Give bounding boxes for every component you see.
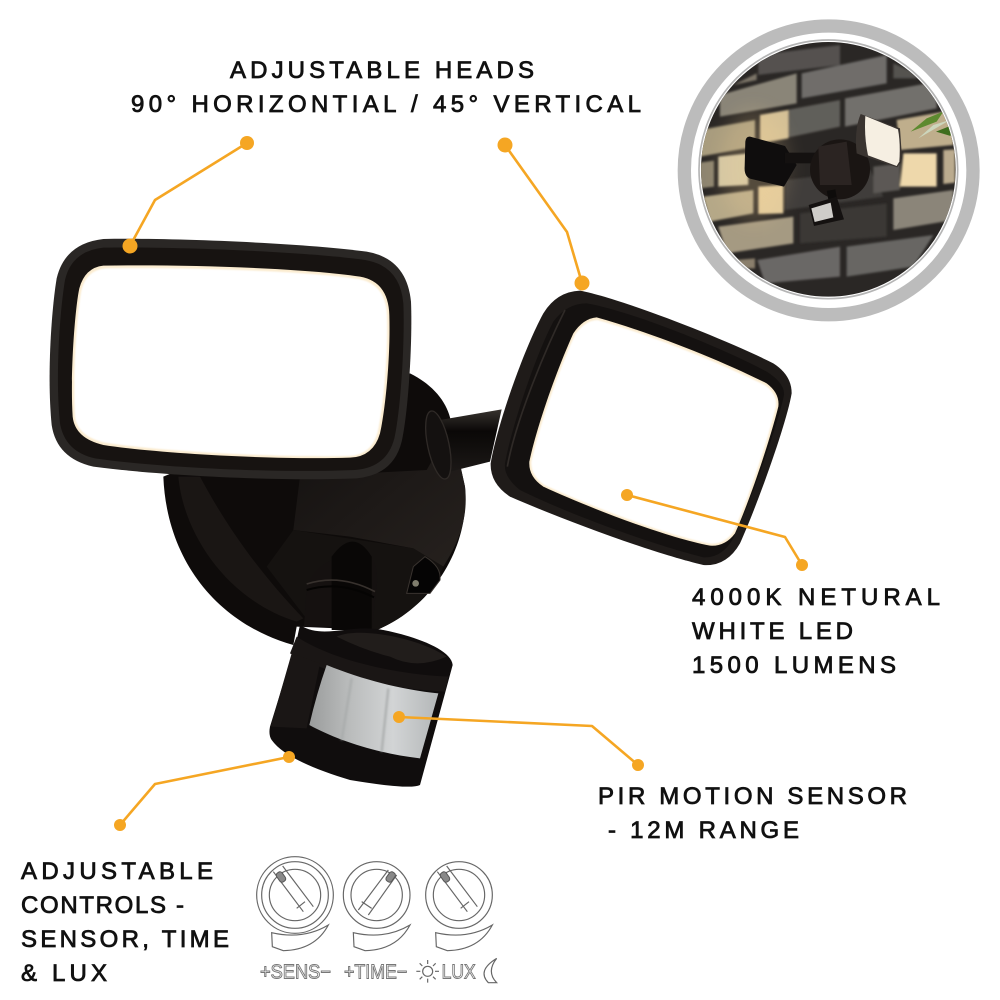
arm to right head — [421, 409, 502, 481]
icon: moon — [484, 958, 497, 983]
left lamp head — [50, 239, 411, 479]
dial: sensitivity — [257, 857, 333, 951]
label: PIR motion sensor — [598, 783, 907, 844]
label: adjustable controls: SENSOR, TIME — [21, 926, 229, 953]
leader line: PIR sensor — [393, 711, 644, 771]
label: LED colour and lumens: WHITE LED — [692, 618, 853, 645]
icon: leaves — [911, 112, 951, 138]
label: LED colour and lumens — [692, 584, 940, 679]
heading: adjustable heads — [131, 57, 641, 118]
sensor neck — [304, 542, 377, 630]
inset photo: light mounted on brick wall — [684, 26, 973, 315]
dial labels — [260, 960, 476, 983]
label: PIR motion sensor: - 12M RANGE — [608, 817, 799, 844]
leader line: left head — [122, 136, 254, 254]
thin inner ring — [699, 40, 958, 299]
label: adjustable controls: ADJUSTABLE — [21, 858, 213, 885]
outer grey ring — [684, 26, 973, 315]
wall base plate — [163, 373, 466, 645]
right lamp head — [491, 291, 792, 565]
sensor — [827, 190, 836, 199]
label: adjustable controls: CONTROLS - — [21, 892, 184, 919]
warm wall glow — [720, 110, 787, 223]
heading: adjustable heads: ADJUSTABLE HEADS — [230, 57, 534, 84]
photo: mounted fixture — [745, 114, 902, 226]
raised lower housing — [267, 530, 443, 630]
light panel — [72, 265, 390, 458]
motion sensor housing — [269, 625, 453, 787]
dial: lux — [426, 862, 492, 951]
label: PIR motion sensor: PIR MOTION SENSOR — [598, 783, 907, 810]
label: adjustable controls: & LUX — [21, 960, 107, 987]
label: LED colour and lumens: 1500 LUMENS — [692, 652, 896, 679]
dial labels: +SENS− — [260, 960, 331, 983]
brick wall scene — [697, 40, 960, 300]
plate rim — [178, 477, 303, 622]
dial labels: +TIME− — [344, 960, 407, 983]
heading: adjustable heads: 90° HORIZONTIAL / 45° VERTICAL — [131, 91, 641, 118]
leader line: adjustable controls — [114, 751, 295, 831]
label: LED colour and lumens: 4000K NETURAL — [692, 584, 940, 611]
right head — [856, 114, 902, 167]
dial labels: LUX — [442, 960, 476, 983]
raised upper housing — [293, 427, 466, 567]
dial: time — [343, 862, 410, 951]
product: twin head flood light — [50, 239, 792, 787]
icon: sun — [416, 960, 439, 983]
left head — [745, 137, 797, 187]
PIR lens — [309, 665, 438, 758]
base plate — [810, 139, 870, 199]
leader line: LED panel — [621, 489, 808, 571]
dusk sensor — [407, 557, 440, 593]
label: adjustable controls — [21, 858, 229, 987]
light panel — [529, 317, 779, 546]
leader line: right head — [498, 138, 590, 290]
control dials diagram — [257, 857, 497, 983]
